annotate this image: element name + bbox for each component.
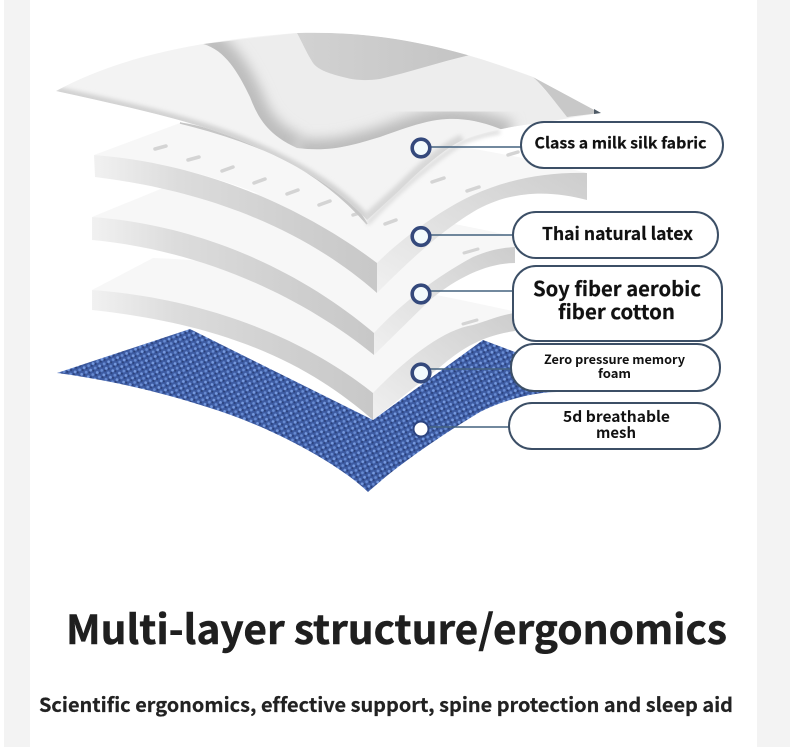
marker dot <box>412 139 430 157</box>
fabric bottom edge shade <box>56 91 367 220</box>
fold body <box>203 33 570 149</box>
callout 4: Zero pressure memory foam: foam <box>598 363 631 382</box>
callout 3: Soy fiber aerobic fiber cotton <box>412 266 722 341</box>
slit mark <box>464 249 478 253</box>
title: Multi-layer structure/ergonomics <box>66 598 727 656</box>
left background strip <box>4 0 30 747</box>
fabric shadow on latex <box>180 123 367 224</box>
layer: 5d breathable mesh <box>57 329 557 492</box>
leader line <box>428 290 514 292</box>
callout 5: 5d breathable mesh: mesh <box>596 422 636 443</box>
right lobe edge shade <box>367 140 463 220</box>
callout 2: Thai natural latex <box>412 212 718 258</box>
fold: far right underside <box>534 78 594 117</box>
callout 3: Soy fiber aerobic fiber cotton: fiber cotton <box>558 296 675 325</box>
label text: Soy fiber aerobic <box>533 273 701 302</box>
label pill <box>513 266 722 341</box>
subtitle: Scientific ergonomics, effective support, spine protection and sleep aid <box>39 689 733 718</box>
right background strip <box>757 0 790 747</box>
label pill <box>511 344 720 391</box>
label pill <box>509 403 720 449</box>
layer: Thai natural latex <box>94 123 587 293</box>
label text: Zero pressure memory <box>544 349 685 368</box>
callout 4: Zero pressure memory foam <box>412 344 720 391</box>
layer: milk silk fabric <box>56 33 601 220</box>
marker dot <box>412 285 430 303</box>
layer: memory foam <box>92 258 530 420</box>
marker dot <box>412 228 430 245</box>
mattress layer diagram <box>56 33 601 492</box>
fabric tip <box>594 109 601 114</box>
label text: Class a milk silk fabric <box>534 132 706 154</box>
label text: 5d breathable <box>563 406 670 427</box>
leader line <box>428 426 510 428</box>
label pill <box>521 122 723 168</box>
marker dot <box>414 422 428 436</box>
fold shades <box>203 40 510 151</box>
label text: Thai natural latex <box>542 221 693 246</box>
leader line <box>428 146 522 148</box>
leader line <box>428 368 512 370</box>
slit mark <box>463 320 477 324</box>
fold: back underside <box>297 33 470 80</box>
layer: soy fiber cotton <box>92 188 530 355</box>
leader line <box>428 234 514 236</box>
label pill <box>513 212 718 258</box>
callout 1: Class a milk silk fabric <box>412 122 723 168</box>
air slits <box>155 146 518 224</box>
callout 5: 5d breathable mesh <box>414 403 720 449</box>
marker dot <box>412 364 430 382</box>
